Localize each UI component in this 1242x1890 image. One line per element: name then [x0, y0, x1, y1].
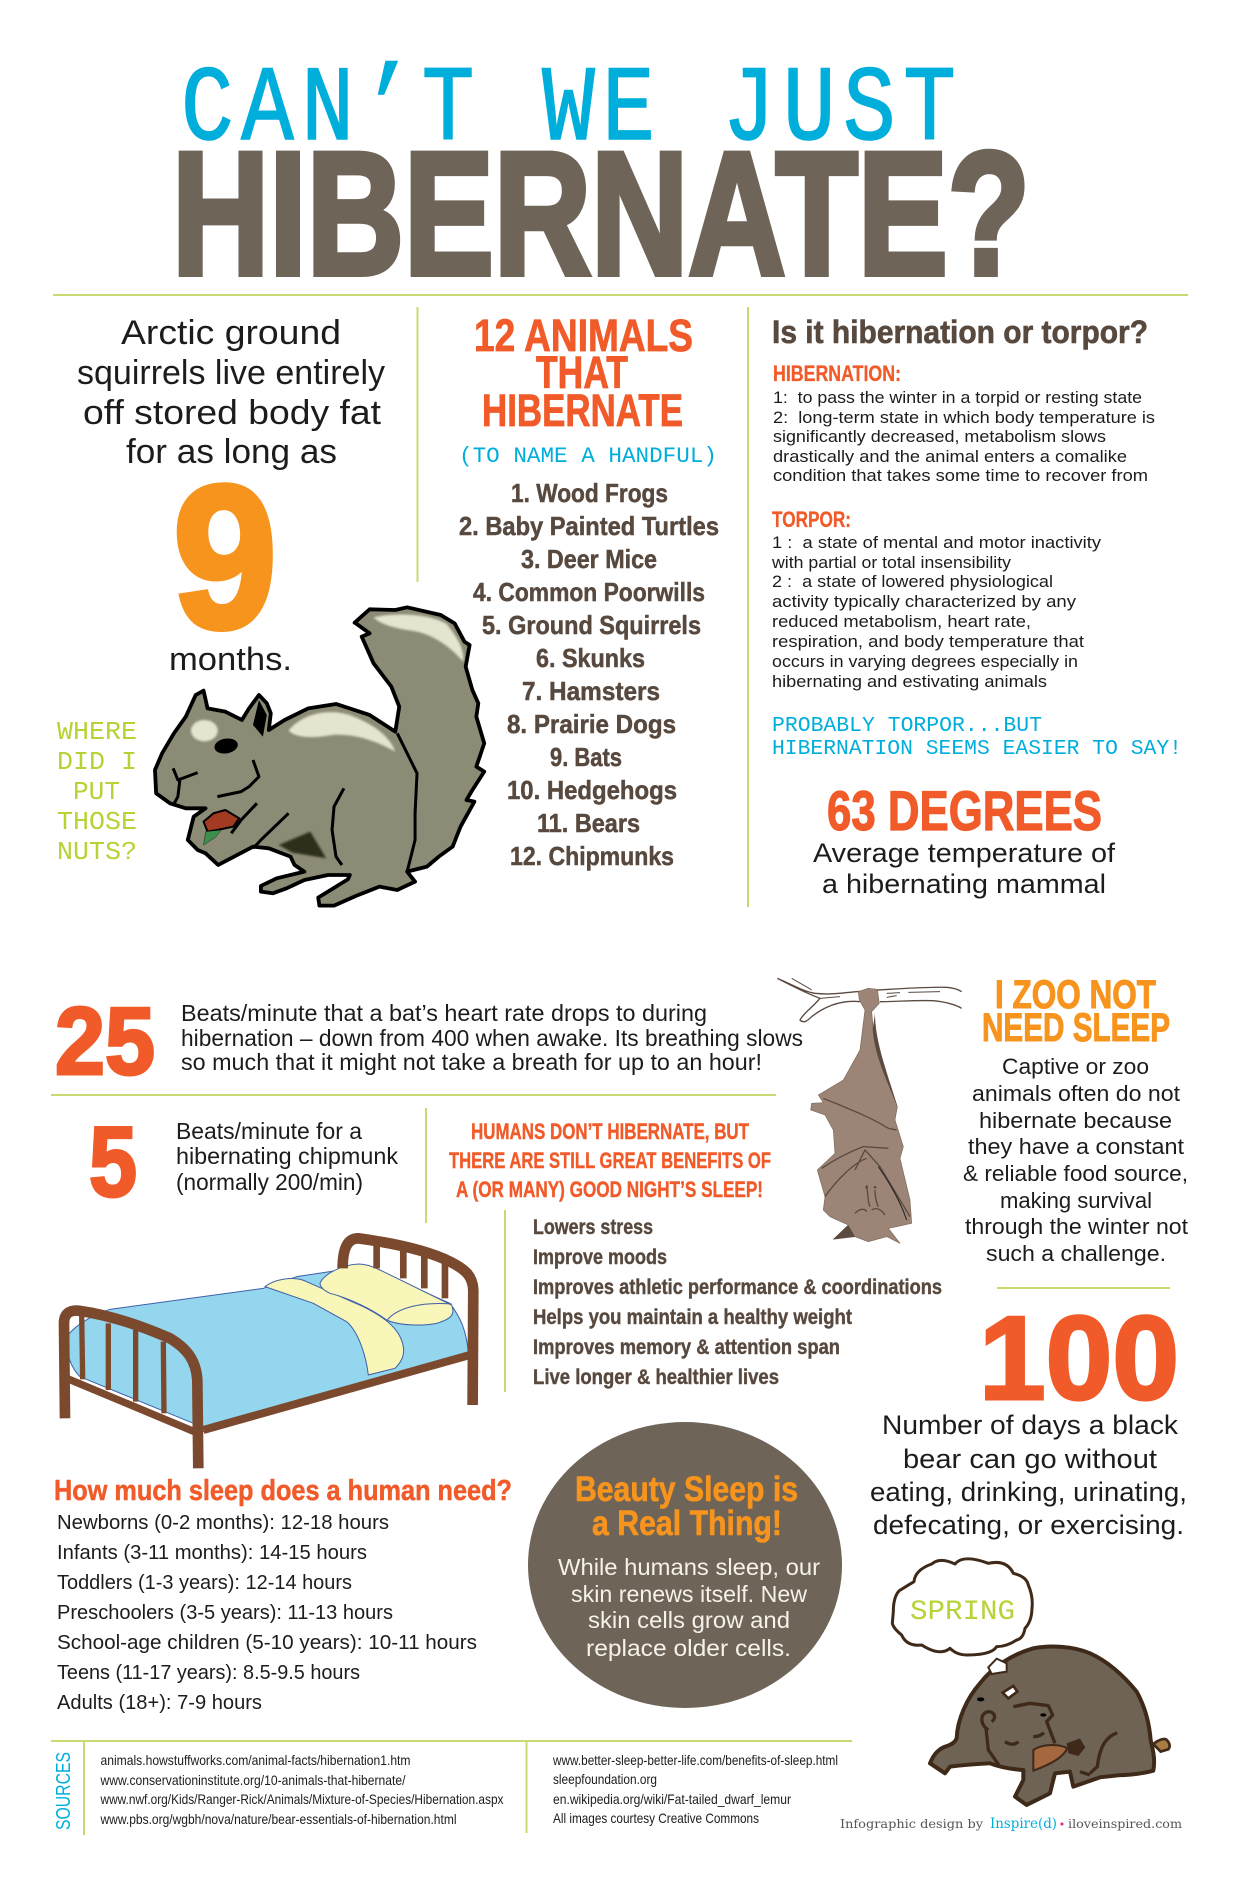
hibernation definition: drastically and the animal enters a comalike	[773, 447, 1127, 466]
panel: sources	[51, 1741, 852, 1835]
sleep hours list: Preschoolers (3-5 years): 11-13 hours	[57, 1601, 393, 1624]
heading: Beauty Sleep is	[575, 1470, 798, 1509]
animal list: 5. Ground Squirrels	[482, 610, 701, 640]
torpor definition	[771, 507, 1102, 691]
torpor definition: with partial or total insensibility	[771, 553, 1012, 572]
source links left: animals.howstuffworks.com/animal-facts/hibernation1.htm	[100, 1752, 410, 1768]
stat: 100 days: defecating, or exercising.	[873, 1510, 1184, 1540]
text block: skin cells grow and	[588, 1607, 790, 1633]
heading: HIBERNATE	[482, 385, 683, 436]
heading: HUMANS DON’T HIBERNATE, BUT	[471, 1119, 749, 1144]
text block: & reliable food source,	[963, 1161, 1188, 1186]
heading: THAT	[536, 347, 628, 398]
credit line: iloveinspired.com	[1068, 1816, 1182, 1831]
hibernation definition: condition that takes some time to recover from	[773, 466, 1148, 485]
stat: 100 days: 100	[979, 1292, 1179, 1425]
torpor definition: occurs in varying degrees especially in	[772, 652, 1078, 671]
credit line: Inspire(d)	[990, 1816, 1057, 1832]
icon: thought bubble	[892, 1559, 1032, 1655]
torpor definition: hibernating and estivating animals	[772, 672, 1047, 691]
heading: THERE ARE STILL GREAT BENEFITS OF	[449, 1148, 771, 1173]
source links right: www.better-sleep-better-life.com/benefits-of-sleep.html	[552, 1752, 838, 1768]
icon: squirrel	[155, 607, 484, 906]
animal list: 6. Skunks	[536, 643, 645, 673]
text block: Captive or zoo	[1002, 1054, 1149, 1079]
panel: 12 animals that hibernate	[459, 310, 719, 871]
where did I put those nuts: PUT	[73, 777, 120, 807]
heading: NEED SLEEP	[982, 1006, 1170, 1050]
hibernation definition: 2: long-term state in which body temperature is	[773, 408, 1155, 427]
sleep hours list: Infants (3-11 months): 14-15 hours	[57, 1541, 367, 1564]
animal list: 12. Chipmunks	[510, 841, 674, 871]
where did I put those nuts: WHERE	[57, 717, 137, 747]
title: CAN’T WE JUST	[181, 52, 963, 172]
where did I put those nuts: NUTS?	[57, 837, 137, 867]
icon: bat on branch	[777, 978, 962, 1243]
stat: 100 days: bear can go without	[903, 1444, 1158, 1474]
source links right: sleepfoundation.org	[553, 1771, 657, 1787]
text block	[558, 1554, 820, 1661]
benefits list: Improves memory & attention span	[533, 1336, 840, 1359]
stat: 5 beats per minute: hibernating chipmunk	[176, 1143, 399, 1169]
benefits list	[533, 1216, 942, 1389]
heading: How much sleep does a human need?	[54, 1475, 512, 1507]
text block: replace older cells.	[586, 1635, 791, 1661]
animal list: 1. Wood Frogs	[511, 478, 668, 508]
icon: bed	[64, 1238, 473, 1468]
stat: 63 degrees: a hibernating mammal	[822, 869, 1106, 899]
torpor definition: 1 : a state of mental and motor inactivity	[772, 533, 1102, 552]
animal list: 3. Deer Mice	[521, 544, 657, 574]
benefits list: Live longer & healthier lives	[533, 1366, 779, 1389]
benefits list: Helps you maintain a healthy weight	[533, 1306, 852, 1329]
torpor definition: 2 : a state of lowered physiological	[772, 572, 1053, 591]
stat: 63 degrees	[813, 779, 1116, 899]
source links left	[100, 1752, 503, 1827]
stat: 100 days	[870, 1292, 1187, 1540]
stat: 100 days: Number of days a black	[882, 1410, 1179, 1440]
stat: 25 beats per minute: so much that it might not take a breath for up to an hour!	[181, 1049, 762, 1075]
text block: arctic ground squirrels: squirrels live entirely	[77, 354, 385, 392]
subheading: (TO NAME A HANDFUL)	[459, 444, 717, 469]
animal list: 9. Bats	[550, 742, 622, 772]
animal list: 4. Common Poorwills	[473, 577, 705, 607]
animal list: 7. Hamsters	[522, 676, 660, 706]
icon: sleeping bear	[930, 1647, 1170, 1805]
torpor definition: reduced metabolism, heart rate,	[772, 612, 1031, 631]
heading: I ZOO NOT	[995, 973, 1156, 1017]
months label: months.	[169, 641, 292, 677]
heading	[474, 310, 693, 436]
source links left: www.conservationinstitute.org/10-animals-that-hibernate/	[100, 1772, 406, 1788]
panel: sleep benefits	[449, 1119, 942, 1389]
text block: While humans sleep, our	[558, 1554, 820, 1580]
text block: arctic ground squirrels: off stored body fat	[83, 394, 382, 432]
stat: 63 degrees: 63 DEGREES	[827, 779, 1102, 842]
where did I put those nuts: THOSE	[57, 807, 137, 837]
sources label: SOURCES	[53, 1752, 75, 1830]
text block: such a challenge.	[986, 1241, 1166, 1266]
hibernation definition: HIBERNATION:	[773, 361, 901, 386]
heading	[449, 1119, 771, 1202]
heading: Is it hibernation or torpor?	[772, 314, 1148, 350]
heading: 12 ANIMALS	[474, 310, 693, 361]
credit line	[840, 1816, 1182, 1832]
callout: probably torpor: PROBABLY TORPOR...BUT	[772, 714, 1042, 738]
stat: 25 beats per minute: Beats/minute that a bat’s heart rate drops to during	[181, 1000, 707, 1026]
torpor definition: activity typically characterized by any	[772, 592, 1077, 611]
where did I put those nuts	[57, 717, 137, 867]
sleep hours list: Toddlers (1-3 years): 12-14 hours	[57, 1571, 352, 1594]
panel: squirrel fact	[57, 314, 385, 867]
stat: 25 beats per minute: 25	[55, 988, 155, 1095]
source links left: www.pbs.org/wgbh/nova/nature/bear-essentials-of-hibernation.html	[100, 1811, 456, 1827]
text block: arctic ground squirrels	[77, 314, 385, 471]
stat: 5 beats per minute: Beats/minute for a	[176, 1118, 362, 1144]
heading: A (OR MANY) GOOD NIGHT’S SLEEP!	[456, 1177, 763, 1202]
text block: arctic ground squirrels: Arctic ground	[121, 314, 341, 352]
hibernation definition	[773, 361, 1155, 485]
text block: animals often do not	[972, 1081, 1181, 1106]
sleep hours list	[57, 1511, 477, 1714]
icon: thought bubble: SPRING	[910, 1597, 1015, 1628]
hibernation definition: 1: to pass the winter in a torpid or resting state	[773, 388, 1142, 407]
source links right: All images courtesy Creative Commons	[553, 1810, 759, 1826]
sleep hours list: School-age children (5-10 years): 10-11 hours	[57, 1631, 477, 1654]
text block: making survival	[1000, 1188, 1152, 1213]
source links right	[552, 1752, 838, 1826]
panel: I zoo not need sleep	[963, 973, 1189, 1266]
source links left: www.nwf.org/Kids/Ranger-Rick/Animals/Mixture-of-Species/Hibernation.aspx	[100, 1791, 503, 1807]
animal list: 11. Bears	[537, 808, 640, 838]
benefits list: Improve moods	[533, 1246, 667, 1269]
heading: a Real Thing!	[592, 1504, 782, 1543]
benefits list: Improves athletic performance & coordinations	[533, 1276, 942, 1299]
stat: 5 beats per minute: (normally 200/min)	[176, 1169, 363, 1195]
text block: skin renews itself. New	[571, 1581, 807, 1607]
where did I put those nuts: DID I	[57, 747, 137, 777]
stat: 100 days: eating, drinking, urinating,	[870, 1477, 1187, 1507]
hibernation definition: significantly decreased, metabolism slows	[773, 427, 1106, 446]
torpor definition: TORPOR:	[772, 507, 851, 532]
text block: through the winter not	[965, 1214, 1189, 1239]
animal list: 8. Prairie Dogs	[507, 709, 676, 739]
benefits list: Lowers stress	[533, 1216, 653, 1239]
panel: beauty sleep circle	[528, 1422, 842, 1708]
heading	[982, 973, 1170, 1050]
callout: probably torpor: HIBERNATION SEEMS EASIER TO SAY!	[772, 737, 1182, 761]
torpor definition: respiration, and body temperature that	[772, 632, 1084, 651]
stat: 25 beats per minute: hibernation – down from 400 when awake. Its breathing slows	[181, 1025, 803, 1051]
text block: arctic ground squirrels: for as long as	[126, 433, 337, 471]
credit line: Infographic design by	[840, 1816, 984, 1831]
stat: 25 beats per minute	[55, 988, 803, 1095]
title	[172, 52, 1030, 312]
stat: 5 beats per minute: 5	[89, 1106, 137, 1217]
stat: 5 beats per minute	[89, 1106, 399, 1217]
text block	[963, 1054, 1189, 1266]
big number 9: 9	[173, 444, 277, 671]
stat: 63 degrees: Average temperature of	[813, 838, 1116, 868]
callout: probably torpor	[772, 714, 1182, 761]
sleep hours list: Newborns (0-2 months): 12-18 hours	[57, 1511, 389, 1534]
panel: hibernation or torpor	[771, 314, 1182, 899]
animal list: 10. Hedgehogs	[507, 775, 677, 805]
sleep hours list: Adults (18+): 7-9 hours	[57, 1691, 262, 1714]
animal list	[459, 478, 719, 871]
sleep hours list: Teens (11-17 years): 8.5-9.5 hours	[57, 1661, 360, 1684]
animal list: 2. Baby Painted Turtles	[459, 511, 719, 541]
text block: hibernate because	[979, 1108, 1172, 1133]
source links right: en.wikipedia.org/wiki/Fat-tailed_dwarf_lemur	[553, 1791, 791, 1807]
panel: how much sleep	[54, 1475, 512, 1714]
text block: they have a constant	[968, 1134, 1185, 1159]
heading	[575, 1470, 798, 1543]
